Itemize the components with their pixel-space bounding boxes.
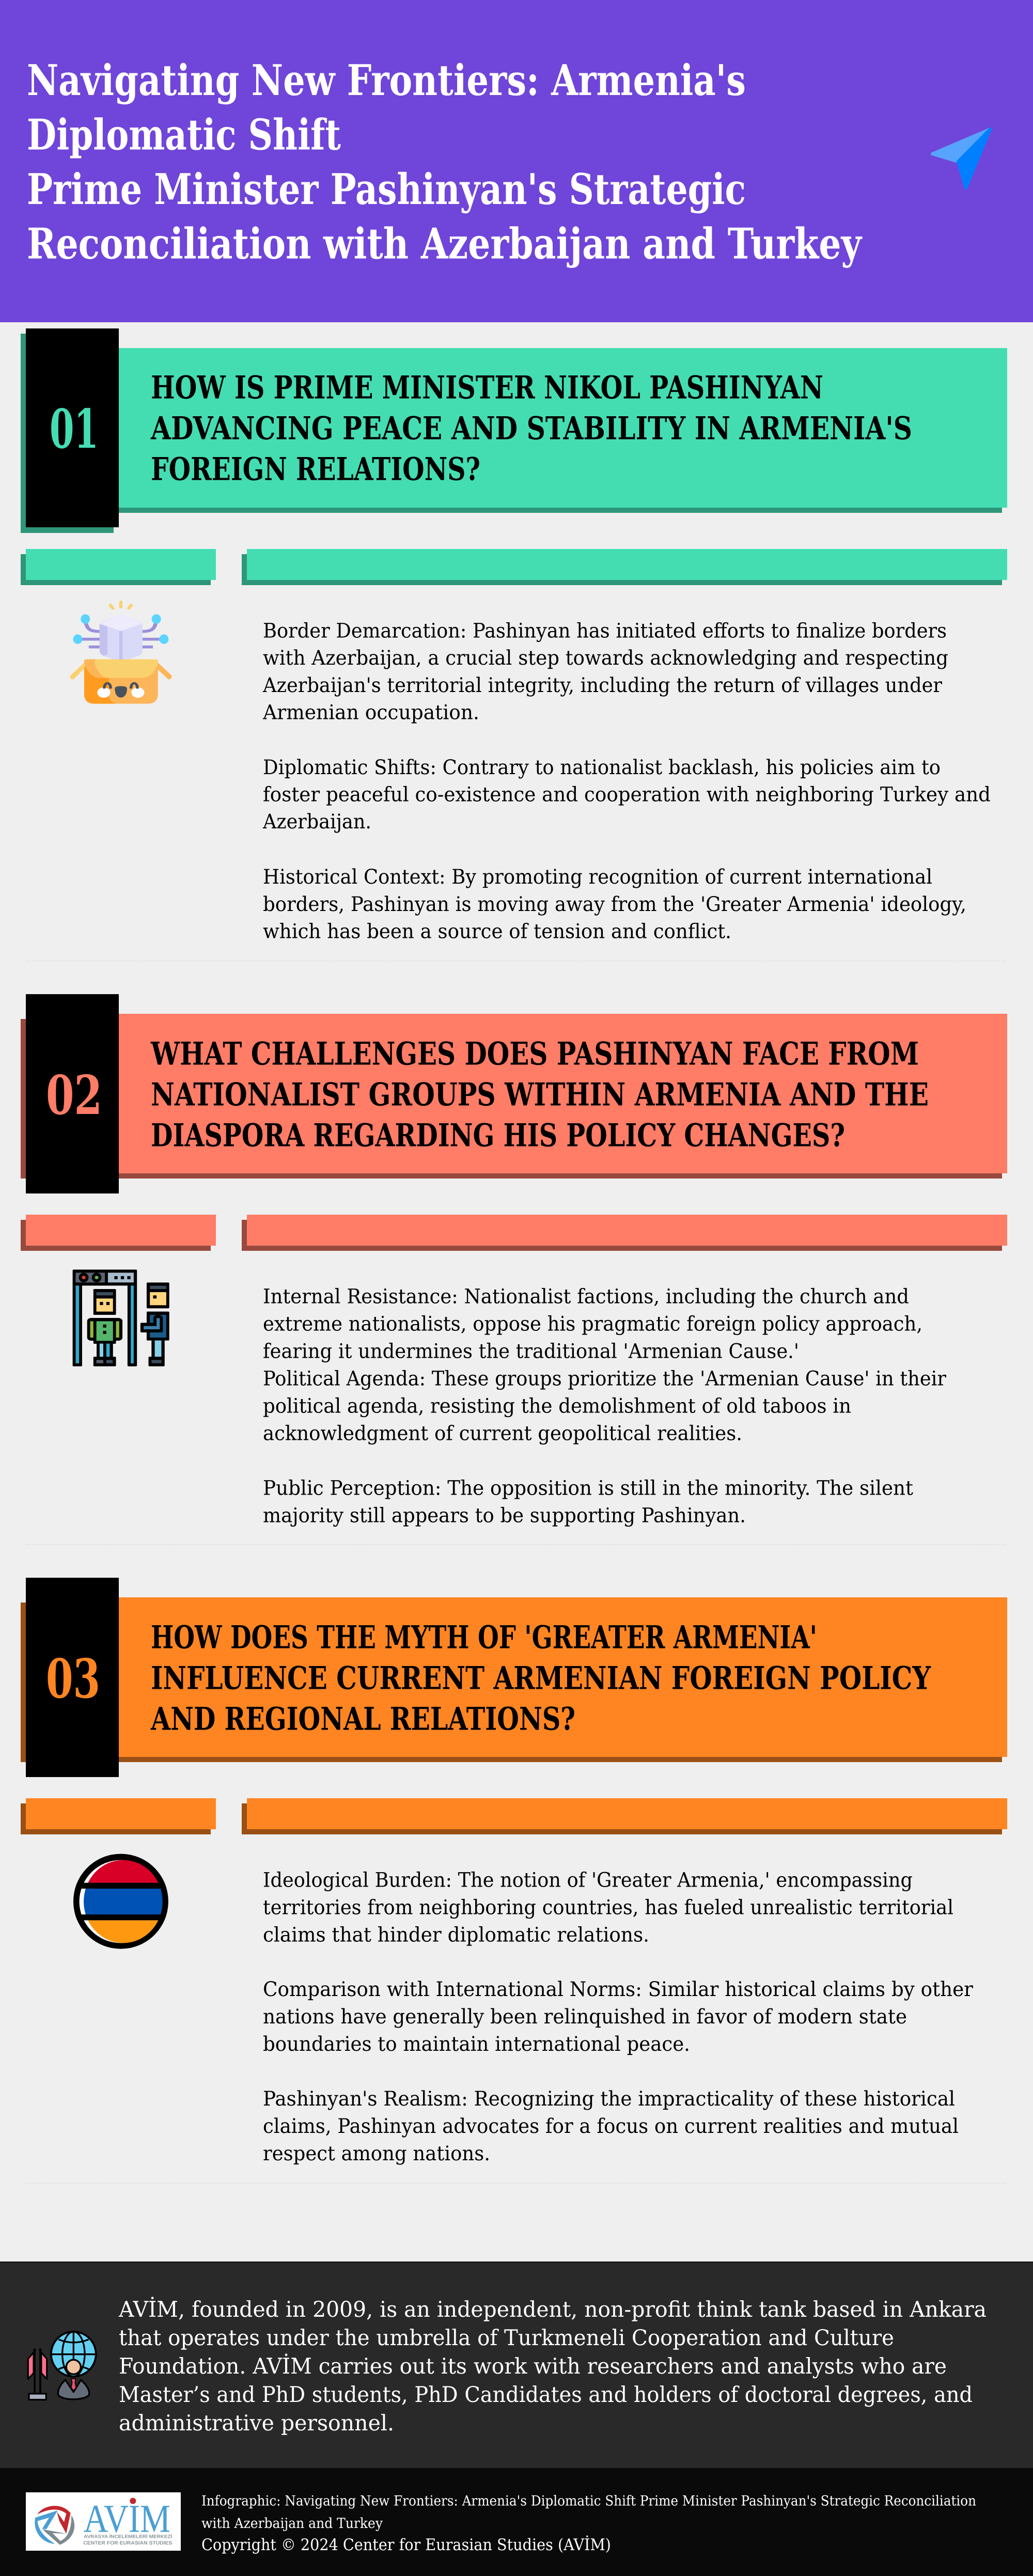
about text xyxy=(118,2297,987,2436)
footer credit text: Infographic: Navigating New Frontiers: Armenia's Diplomatic Shift Prime Minister Pashinyan's Strategic Reconciliation xyxy=(201,2493,976,2509)
about text: Master’s and PhD students, PhD Candidates and holders of doctoral degrees, and xyxy=(119,2382,973,2407)
section 3 body text: nations have generally been relinquished in favor of modern state xyxy=(263,2005,907,2029)
icon: security gate scanner xyxy=(73,1269,169,1366)
title: Navigating New Frontiers: Armenia's xyxy=(27,56,746,105)
section 1 body text: foster peaceful co-existence and cooperation with neighboring Turkey and xyxy=(263,783,991,807)
section 2 right bar xyxy=(242,1215,1007,1251)
logo: AVIM xyxy=(84,2496,170,2540)
section 1 number: 01 xyxy=(50,397,99,461)
section 3 xyxy=(21,1578,1007,2165)
section 3 body text: respect among nations. xyxy=(263,2142,490,2165)
section 1 question xyxy=(150,370,912,488)
logo: AVRASYA İNCELEMELERİ MERKEZİ xyxy=(84,2534,172,2539)
section 3 body text: claims that hinder diplomatic relations. xyxy=(263,1923,649,1947)
logo: CENTER FOR EURASIAN STUDIES xyxy=(83,2540,172,2546)
icon: open box with cube xyxy=(70,601,172,704)
section 2 heading card xyxy=(21,994,1007,1193)
section 2 xyxy=(21,994,1007,1528)
section 2 body text: extreme nationalists, oppose his pragmatic foreign policy approach, xyxy=(263,1313,922,1336)
section 1 body text: Diplomatic Shifts: Contrary to nationalist backlash, his policies aim to xyxy=(263,756,941,779)
footer credit text: with Azerbaijan and Turkey xyxy=(201,2516,383,2532)
section 2 number: 02 xyxy=(46,1063,102,1127)
section 1 body text: borders, Pashinyan is moving away from the 'Greater Armenia' ideology, xyxy=(263,893,966,916)
logo xyxy=(26,2492,181,2551)
section 2 body text xyxy=(263,1285,946,1528)
icon: Armenian flag circle xyxy=(71,1854,170,1949)
header banner xyxy=(0,0,1033,322)
section 2 body text: acknowledgment of current geopolitical realities. xyxy=(263,1422,742,1445)
section 1 heading card xyxy=(21,328,1007,533)
section 2 body text: Political Agenda: These groups prioritize the 'Armenian Cause' in their xyxy=(263,1368,946,1390)
section 1 left bar xyxy=(21,549,216,585)
section 3 body text: Ideological Burden: The notion of 'Greater Armenia,' encompassing xyxy=(263,1868,913,1892)
about panel xyxy=(0,2261,1033,2468)
about text: administrative personnel. xyxy=(119,2410,394,2436)
section 2 left bar xyxy=(21,1215,216,1251)
section 3 body text: Pashinyan's Realism: Recognizing the impracticality of these historical xyxy=(263,2087,955,2111)
section 1 xyxy=(21,328,1007,943)
footer credit text xyxy=(201,2493,976,2554)
icon: navigation arrow xyxy=(932,129,990,188)
section 3 body text: territories from neighboring countries, has fueled unrealistic territorial xyxy=(263,1896,953,1919)
section 3 question: HOW DOES THE MYTH OF 'GREATER ARMENIA' xyxy=(151,1620,817,1656)
about text: that operates under the umbrella of Turkmeneli Cooperation and Culture xyxy=(119,2325,894,2350)
section 2 body text: Internal Resistance: Nationalist factions, including the church and xyxy=(263,1285,909,1309)
section 1 body text xyxy=(262,620,991,943)
section 3 body text: boundaries to maintain international peace. xyxy=(263,2033,690,2056)
section 3 number: 03 xyxy=(46,1647,100,1710)
about text: Foundation. AVİM carries out its work with researchers and analysts who are xyxy=(119,2353,947,2379)
section 3 body text: Comparison with International Norms: Similar historical claims by other xyxy=(263,1978,973,2001)
section 2 question: DIASPORA REGARDING HIS POLICY CHANGES? xyxy=(151,1118,845,1154)
section 2 question xyxy=(150,1036,929,1154)
section 2 body text: majority still appears to be supporting Pashinyan. xyxy=(263,1504,746,1528)
footer xyxy=(0,2468,1033,2576)
section 3 heading card xyxy=(21,1578,1007,1777)
section 3 body text xyxy=(263,1868,973,2165)
section 1 body text: which has been a source of tension and conflict. xyxy=(263,920,731,943)
section 3 right bar xyxy=(242,1798,1007,1834)
section 2 body text: fearing it undermines the traditional 'Armenian Cause.' xyxy=(263,1340,799,1363)
section 1 body text: with Azerbaijan, a crucial step towards acknowledging and respecting xyxy=(263,647,948,670)
section 2 body text: Public Perception: The opposition is still in the minority. The silent xyxy=(263,1477,913,1500)
section 1 body text: Azerbaijan. xyxy=(262,810,371,834)
footer credit text: Copyright © 2024 Center for Eurasian Studies (AVİM) xyxy=(201,2535,611,2554)
title xyxy=(27,56,863,269)
title: Diplomatic Shift xyxy=(27,111,341,160)
section 1 question: FOREIGN RELATIONS? xyxy=(151,451,480,488)
icon: diplomat with globe and flags xyxy=(28,2332,96,2400)
section 1 body text: Armenian occupation. xyxy=(262,701,479,724)
title: Reconciliation with Azerbaijan and Turkey xyxy=(27,219,863,269)
section 3 left bar xyxy=(21,1798,216,1834)
section 1 body text: Border Demarcation: Pashinyan has initiated efforts to finalize borders xyxy=(263,620,947,642)
section 3 question xyxy=(150,1620,931,1737)
section 3 question: AND REGIONAL RELATIONS? xyxy=(150,1701,575,1737)
section 2 body text: political agenda, resisting the demolishment of old taboos in xyxy=(263,1394,851,1418)
section 1 question: HOW IS PRIME MINISTER NIKOL PASHINYAN xyxy=(151,370,823,406)
section 3 body text: claims, Pashinyan advocates for a focus on current realities and mutual xyxy=(263,2115,959,2138)
section 1 body text: Azerbaijan's territorial integrity, including the return of villages under xyxy=(262,674,942,697)
section 1 body text: Historical Context: By promoting recognition of current international xyxy=(263,866,932,889)
title: Prime Minister Pashinyan's Strategic xyxy=(27,165,746,214)
section 1 right bar xyxy=(242,549,1007,585)
about text: AVİM, founded in 2009, is an independent, non-profit think tank based in Ankara xyxy=(118,2297,987,2322)
